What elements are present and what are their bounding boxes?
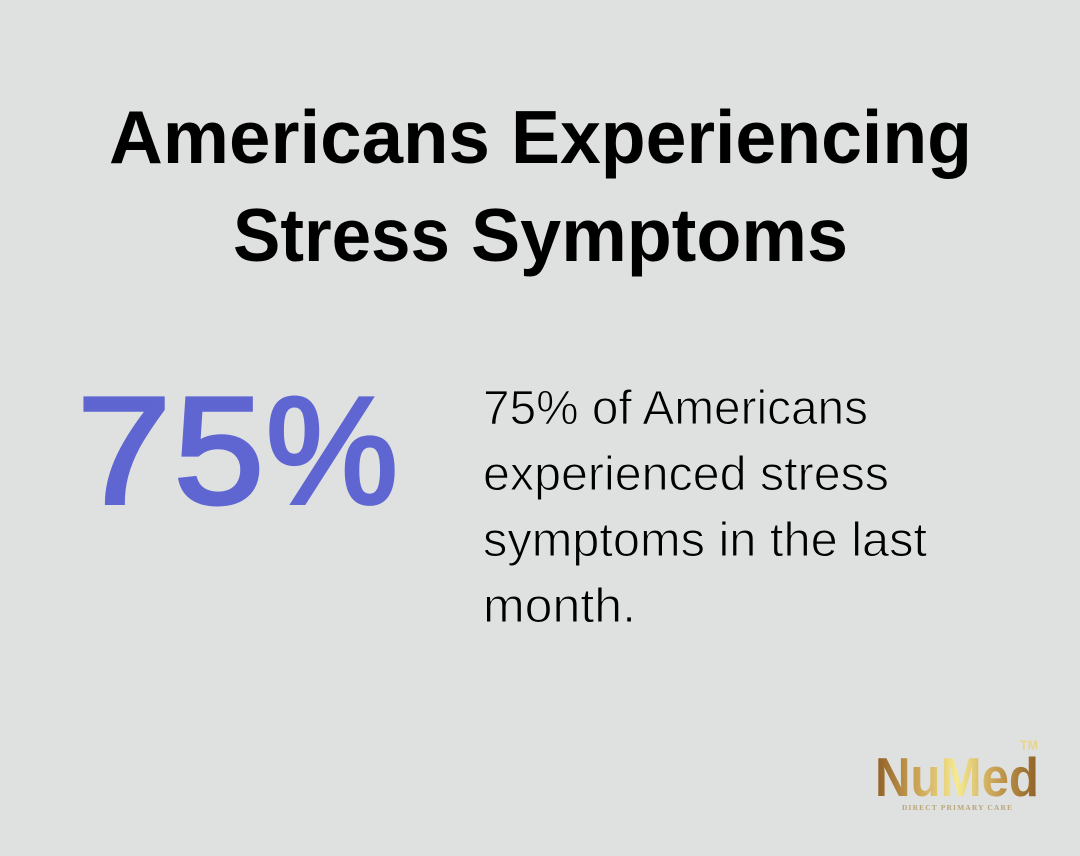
big stat: 75%: % <box>266 366 398 536</box>
title: Americans <box>109 95 490 179</box>
description text <box>483 382 927 633</box>
logo wordmark: NuMed <box>875 746 1039 808</box>
description text: 75% of Americans <box>483 382 868 435</box>
title: Stress <box>233 193 450 277</box>
logo: NuMed <box>875 738 1039 812</box>
logo tagline: DIRECT PRIMARY CARE <box>902 803 1012 812</box>
big stat: 75%: 5 <box>174 366 264 536</box>
description text: experienced stress <box>483 448 889 501</box>
big stat: 75% <box>77 366 398 536</box>
big stat: 75%: 7 <box>77 366 171 536</box>
logo trademark: TM <box>1020 738 1038 752</box>
title: Experiencing <box>511 95 972 179</box>
description text: symptoms in the last <box>483 514 927 567</box>
title: Symptoms <box>471 193 848 277</box>
description text: month. <box>483 580 636 633</box>
title <box>109 95 972 277</box>
